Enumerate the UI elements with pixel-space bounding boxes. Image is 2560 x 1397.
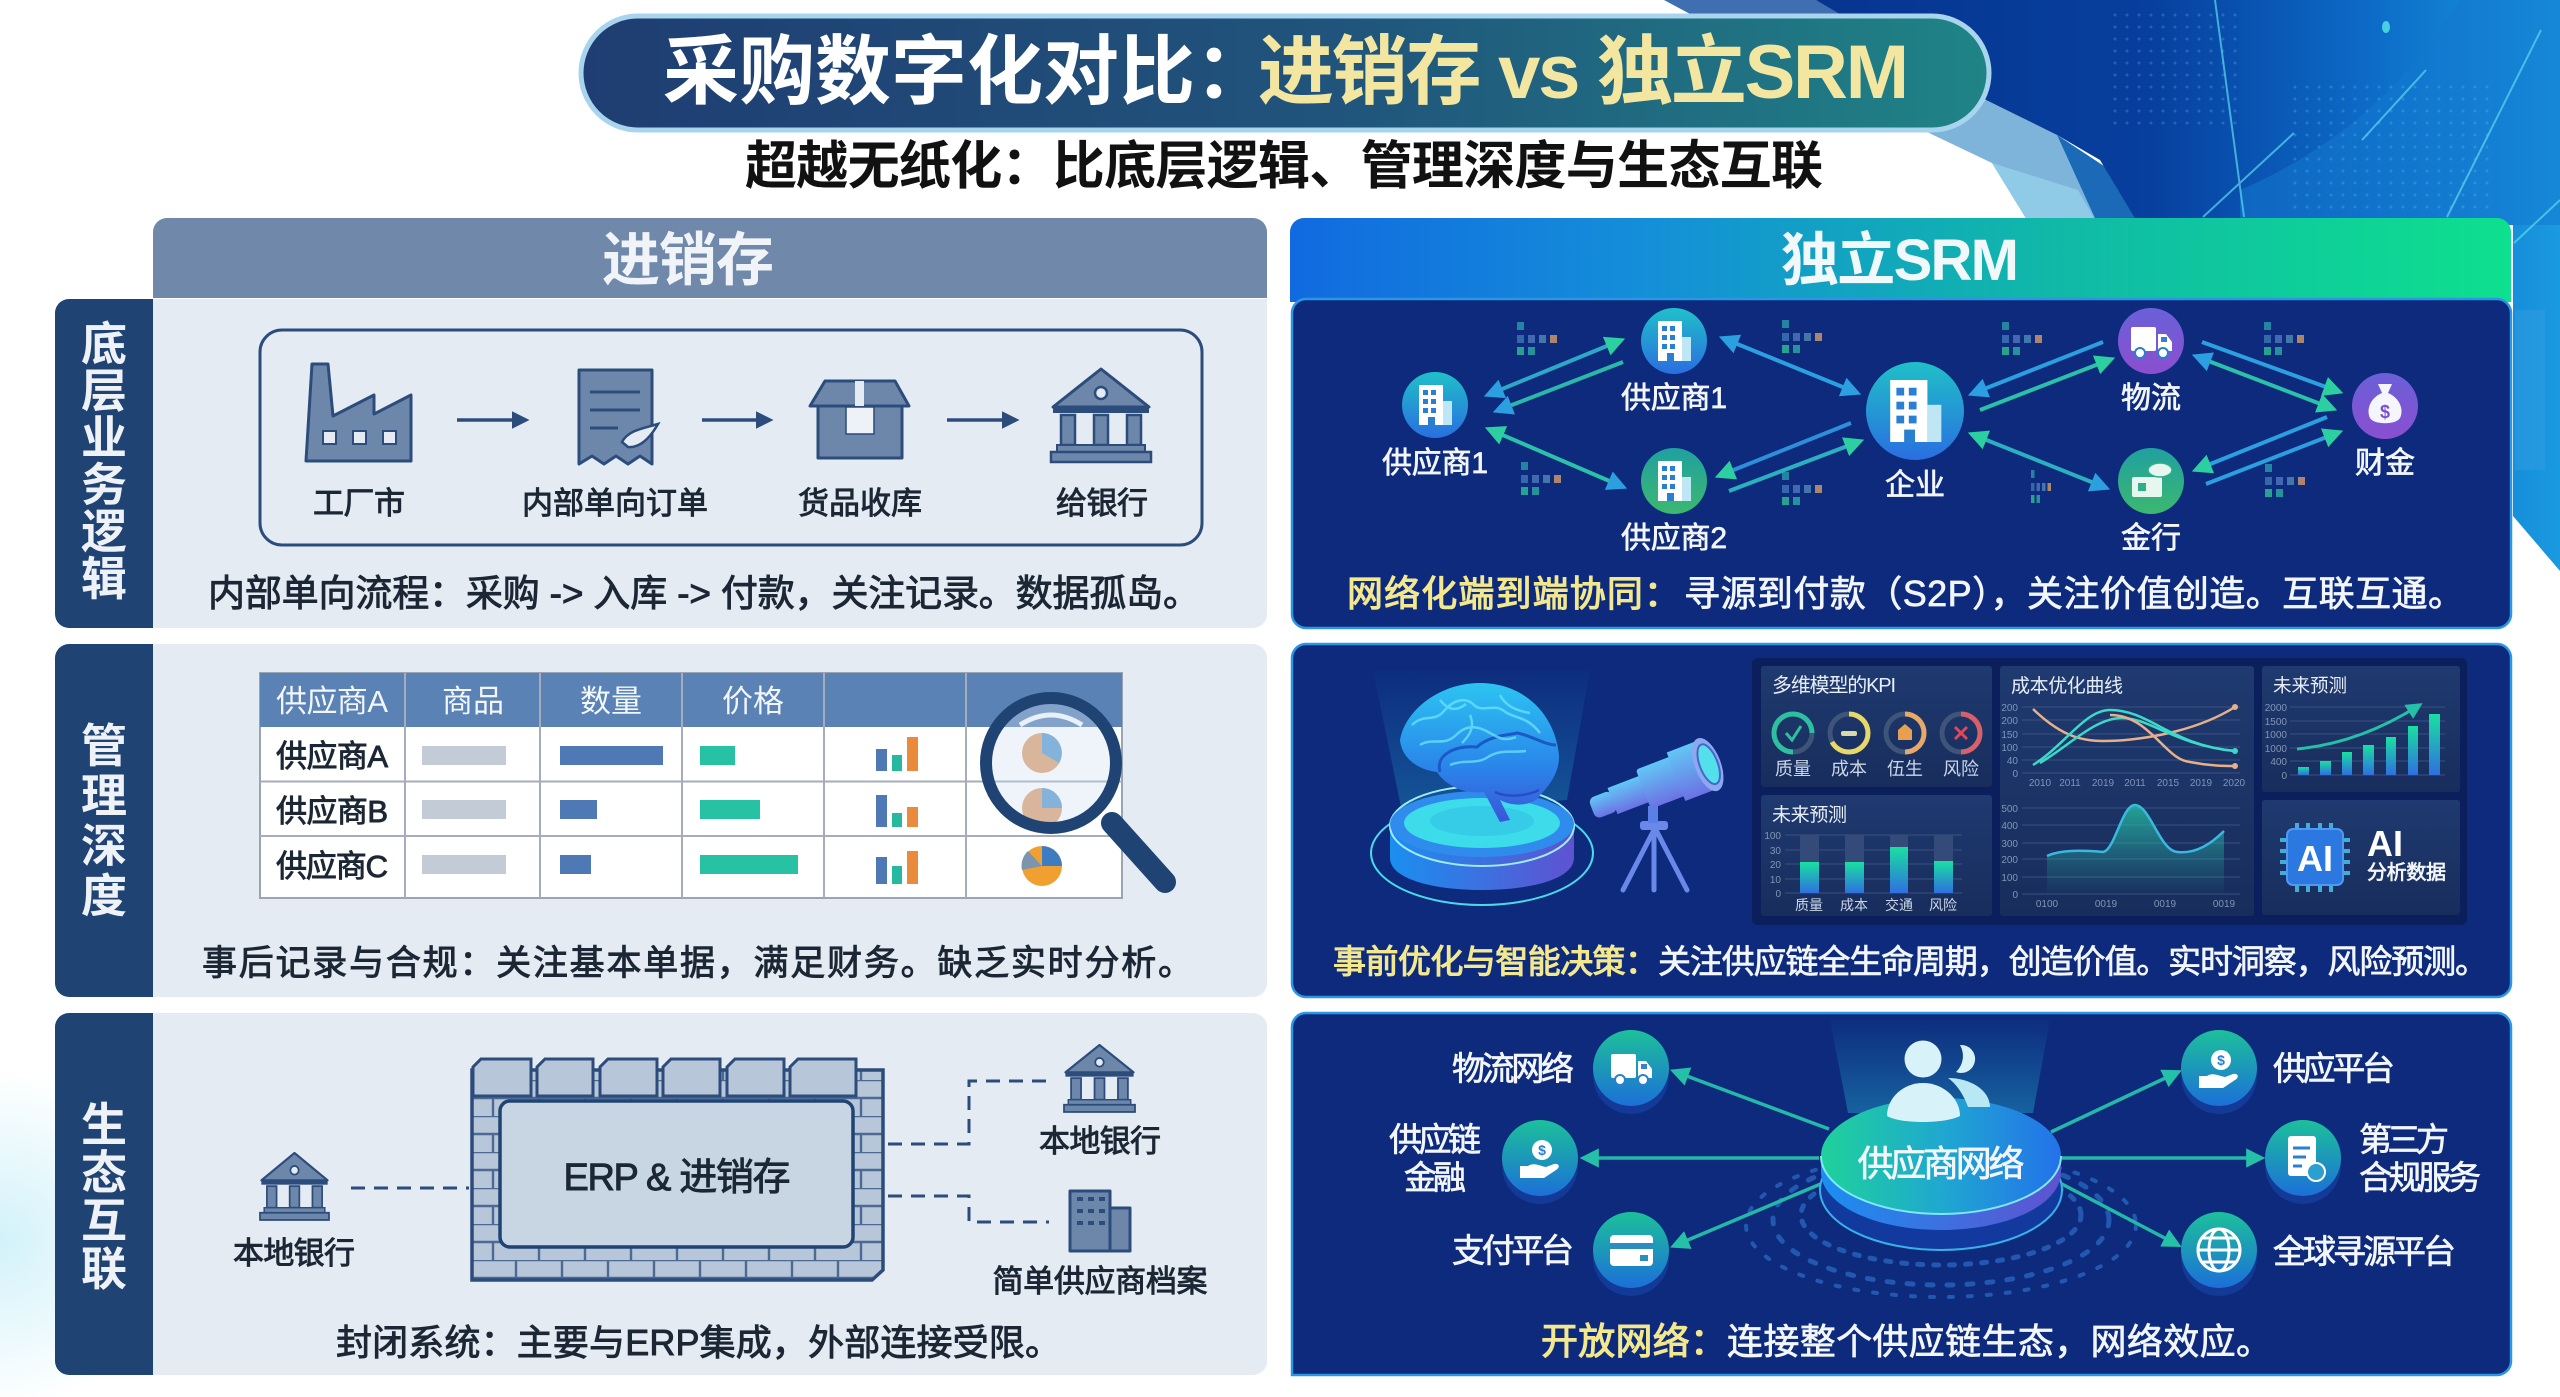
KPI card: 多维模型的KPI [1772,674,1896,697]
row 3 summary yellow: 开放网络： [1541,1321,1727,1362]
row 2 summary yellow: 事前优化与智能决策： [1333,943,1658,980]
flow labels: 工厂市 [313,486,405,521]
right column header: 独立SRM [1781,228,2019,293]
supplier table: 供应商B [276,794,388,829]
AI card: 分析数据 [2367,861,2446,884]
side tab: 底层业务逻辑: 务 [81,459,127,511]
label: supplier archive: 简单供应商档案 [992,1264,1208,1299]
flow labels: 货品收库 [798,486,922,521]
icon: factory [306,364,411,461]
line chart card: 40 [2007,756,2018,767]
node: 支付平台: 支付平台 [1452,1232,1574,1269]
row 3 summary: 封闭系统：主要与ERP集成，外部连接受限。 [336,1322,1061,1363]
line chart card: 2010 [2029,778,2052,789]
bar card with trend arrow [2262,666,2460,792]
supplier table: 价格 [722,684,784,719]
line chart card: 200 [2001,703,2018,714]
icon: local bank right [1064,1045,1135,1112]
node: 供应链金融: 金融 [1404,1159,1466,1196]
brick wall around ERP [472,1059,883,1280]
bar card: future forecast: 0 [1775,889,1781,900]
line chart card: 0 [2012,890,2018,901]
dotted halo [1746,1153,2136,1297]
subtitle: 超越无纸化：比底层逻辑、管理深度与生态互联 [745,138,1823,196]
row 1 summary: 内部单向流程：采购 -> 入库 -> 付款，关注记录。数据孤岛。 [208,573,1200,614]
node: 供应商2 [1621,448,1727,555]
arrow [702,418,770,422]
bar card: future forecast: 风险 [1929,897,1957,913]
node: 供应商1 top: 供应商1 [1621,382,1727,415]
bar card with trend arrow: 2000 [2265,703,2287,714]
row 2 background [153,644,1267,997]
node: 第三方合规服务 [2265,1120,2481,1204]
flow labels: 内部单向订单 [522,486,708,521]
icon: office building [1070,1191,1130,1251]
supplier table [260,673,1122,898]
dashed link to bank [888,1081,1049,1144]
left column header [153,218,1267,298]
supplier table: 供应商A [276,739,388,774]
arrows from hub [1586,1072,2259,1245]
side tab: 底层业务逻辑: 底 [81,318,127,370]
bar card: future forecast: 100 [1764,831,1781,842]
row 2 background [1292,644,2511,997]
title banner [581,16,1989,130]
title banner: 采购数字化对比： [663,30,1271,115]
bar card with trend arrow: 1500 [2265,717,2287,728]
side tab: 管理深度: 管 [81,720,127,772]
left column header: 进销存 [602,228,774,293]
node: 第三方合规服务: 第三方 [2359,1121,2449,1158]
KPI card [1761,666,1992,787]
line chart card: 400 [2001,821,2018,832]
bar card: future forecast: 未来预测 [1772,804,1847,826]
line chart card: 2011 [2124,778,2146,789]
node: 物流 [2118,308,2184,415]
line chart card: 100 [2001,873,2018,884]
side tab: 底层业务逻辑: 辑 [81,553,127,605]
KPI card: 伍生 [1887,759,1923,779]
dashboard [1752,658,2467,925]
side tab: 生态互联: 互 [81,1195,127,1247]
network arrows [1490,339,2337,491]
side tab: 生态互联: 生 [81,1099,127,1151]
label: local bank right: 本地银行 [1039,1124,1161,1159]
node: 供应链金融 [1389,1120,1578,1204]
bar card: future forecast: 质量 [1795,897,1823,913]
node: 企业: 企业 [1885,469,1945,502]
side tab: 管理深度 [55,644,153,997]
node: 财金 [2352,373,2418,480]
right panel row 1: network [1292,299,2511,628]
blue tech background top right [1664,0,2560,571]
node: 企业 [1866,362,1964,502]
left panel row 3: ecosystem [55,1013,1267,1375]
node: 物流网络 [1452,1030,1669,1114]
label: local bank left: 本地银行 [233,1236,355,1271]
node: 第三方合规服务: 合规服务 [2359,1159,2481,1196]
side tab: 管理深度: 深 [81,820,127,872]
line chart card: 100 [2001,743,2018,754]
dashed link left [351,1186,469,1190]
node: 供应商2: 供应商2 [1621,522,1727,555]
node: 供应链金融: 供应链 [1389,1121,1481,1158]
line chart card: 0 [2012,769,2018,780]
row 3 background [153,1013,1267,1375]
node: 财金: $ [2380,402,2390,422]
side tab: 管理深度: 度 [81,870,127,922]
node: 金行: 金行 [2121,522,2181,555]
arrow [457,418,526,422]
icon: warehouse box [810,381,909,458]
bar card: future forecast [1761,795,1992,916]
bar card with trend arrow: 未来预测 [2273,675,2347,696]
node: 供应平台 [2181,1030,2395,1114]
line chart card: 2019 [2190,778,2213,789]
line chart card: 200 [2001,855,2018,866]
KPI card: 质量 [1775,759,1811,779]
brick wall around ERP: ERP & 进销存 [564,1157,790,1199]
AI card: AI [2297,838,2333,879]
bar card: future forecast: 30 [1770,846,1781,857]
row 1 summary white: 寻源到付款（S2P），关注价值创造。互联互通。 [1684,573,2464,614]
node: 物流: 物流 [2121,382,2181,415]
bar card with trend arrow: 0 [2281,771,2287,782]
line chart card: 2015 [2157,778,2180,789]
row 3 summary white: 连接整个供应链生态，网络效应。 [1727,1321,2272,1362]
side tab: 底层业务逻辑: 逻 [81,506,127,558]
node: 金行 [2118,448,2184,555]
flow labels [313,486,1148,521]
pale cyan glow lower left [0,1060,170,1397]
flow box [260,330,1202,545]
line chart card: 成本优化曲线 [2011,675,2123,697]
line chart card: 2011 [2059,778,2081,789]
line chart card: 200 [2001,716,2018,727]
line chart card: 0019 [2213,899,2236,910]
node: 财金: 财金 [2355,447,2415,480]
pedestal [1371,786,1593,905]
line chart card: 300 [2001,839,2018,850]
bar card: future forecast: 20 [1770,860,1781,871]
row 1 background [1292,299,2511,628]
bar card: future forecast: 交通 [1885,897,1913,913]
row 1 summary yellow: 网络化端到端协同： [1347,573,1680,614]
right panel row 3: open network [1292,1013,2511,1375]
AI card: AI [2367,823,2403,864]
side tab: 管理深度: 理 [81,770,127,822]
KPI card: 风险 [1943,759,1979,779]
node: 支付平台 [1452,1212,1669,1296]
bar card: future forecast: 成本 [1840,897,1868,913]
supplier table: 数量 [580,684,642,719]
node: 全球寻源平台 [2181,1212,2456,1296]
node: 物流网络: 物流网络 [1452,1050,1574,1087]
bar card with trend arrow: 400 [2270,757,2287,768]
side tab: 底层业务逻辑: 层 [81,365,127,417]
side tab: 底层业务逻辑 [55,299,153,628]
data dots [1517,320,2305,505]
line chart card: 0019 [2154,899,2177,910]
side tab: 生态互联: 联 [81,1243,127,1295]
side tab: 生态互联 [55,1013,153,1375]
row 2 summary white: 关注供应链全生命周期，创造价值。实时洞察，风险预测。 [1658,943,2488,980]
icon: bank [1051,369,1151,462]
right column header [1290,218,2511,302]
node: 全球寻源平台: 全球寻源平台 [2273,1233,2456,1270]
supplier table: 商品 [442,684,504,719]
icon: order document [579,370,658,464]
row 3 background [1292,1013,2511,1375]
node: 供应商1 left [1382,372,1488,480]
line chart card: 0019 [2095,899,2118,910]
line chart card: 2019 [2092,778,2115,789]
title banner: 进销存 vs 独立SRM [1258,30,1909,115]
line chart card: 2020 [2223,778,2246,789]
line chart card [2000,666,2254,916]
icon: magnifying glass [986,698,1165,882]
bar card with trend arrow: 1000 [2265,744,2287,755]
line chart card: 0100 [2036,899,2059,910]
bar card: future forecast: 10 [1770,875,1781,886]
side tab: 生态互联: 态 [81,1147,127,1199]
node: 供应平台: 供应平台 [2273,1050,2395,1087]
left panel row 2: management depth [55,644,1267,997]
hub: supplier network [1820,1040,2062,1250]
AI card [2262,800,2460,915]
supplier table: 供应商C [276,849,388,884]
line chart card: 150 [2001,730,2018,741]
supplier table: 供应商A [276,684,388,719]
side tab: 底层业务逻辑: 业 [81,412,127,464]
right panel row 2: intelligence [1292,644,2511,997]
hub beam [1830,1020,2050,1113]
dashed link to supplier archive [888,1196,1049,1222]
line chart card: 500 [2001,804,2018,815]
holographic beam [1373,670,1590,812]
row 1 background [153,299,1267,628]
icon: local bank left [260,1153,329,1220]
left panel row 1: business logic [55,299,1267,628]
KPI card: 成本 [1831,759,1867,779]
flow labels: 给银行 [1056,486,1148,521]
hub: supplier network: 供应商网络 [1858,1143,2024,1184]
arrow [947,418,1016,422]
node: 供应商1 top [1621,308,1727,415]
icon: telescope [1582,734,1730,890]
node: 供应商1 left: 供应商1 [1382,447,1488,480]
bar card with trend arrow: 1000 [2265,730,2287,741]
row 2 summary: 事后记录与合规：关注基本单据，满足财务。缺乏实时分析。 [202,944,1193,983]
icon: brain [1400,683,1559,822]
